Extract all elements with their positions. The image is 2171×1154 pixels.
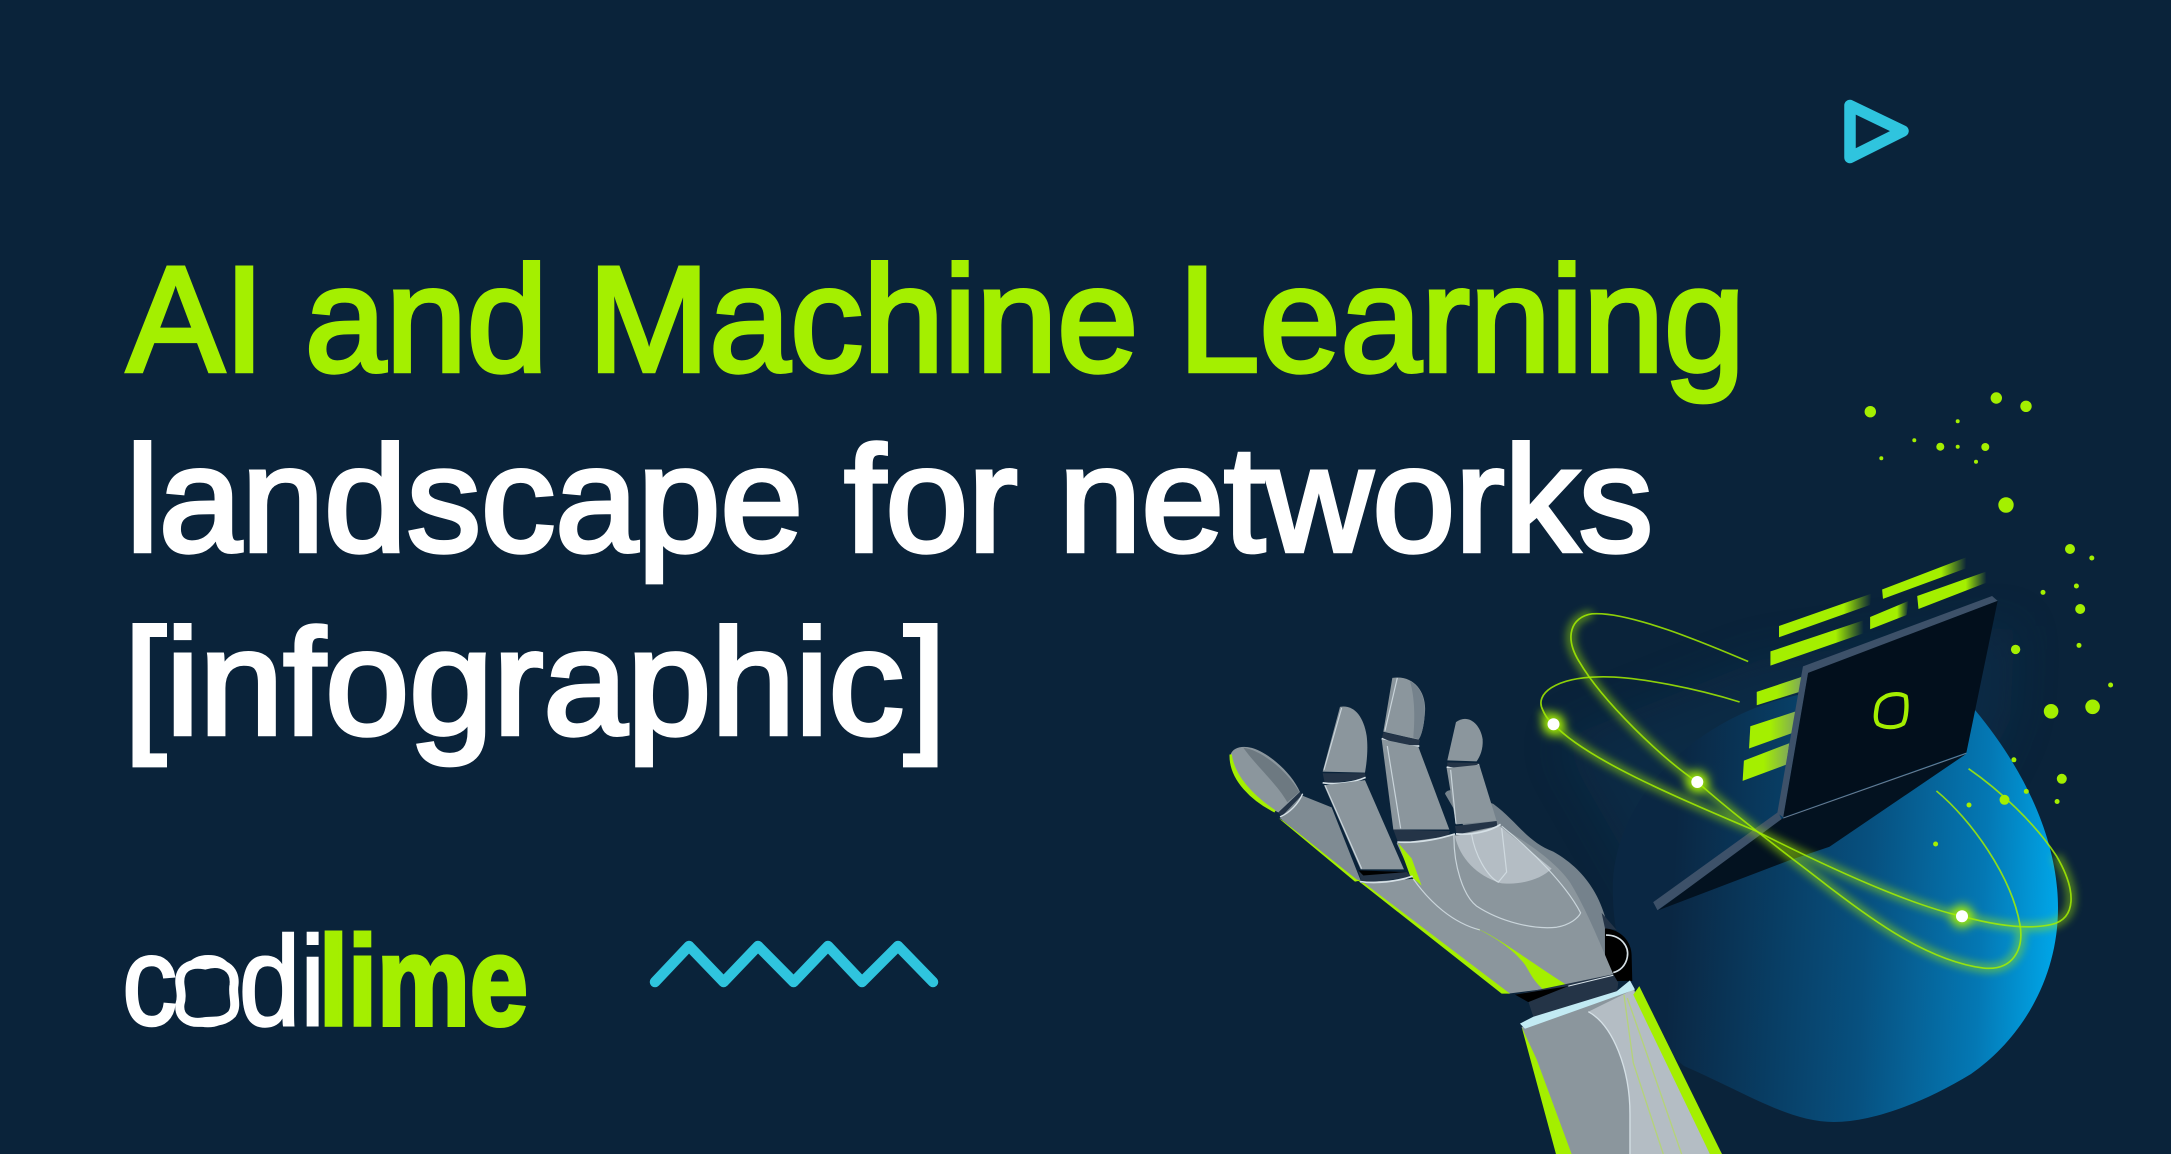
data bars — [1743, 557, 1987, 781]
lime palm accents — [1279, 818, 1568, 994]
title line 1: AI and Machine Learning — [127, 235, 1745, 403]
wrist cuff — [1520, 980, 1635, 1029]
logo: codilime — [122, 910, 528, 1052]
faint glow behind laptop — [1560, 625, 2015, 950]
laptop base — [1658, 754, 1966, 910]
laptop hinge line — [1783, 753, 1966, 818]
logo letter shape: blob o — [180, 964, 235, 1022]
globe — [1560, 625, 2058, 1122]
back of hand — [1445, 790, 1615, 974]
orbit nodes — [1542, 713, 1973, 927]
icon: zigzag — [655, 946, 933, 982]
orbit line b — [1541, 677, 2071, 927]
finger: ring — [1323, 707, 1413, 883]
title — [124, 235, 1745, 766]
title line 3: [infographic] — [124, 598, 946, 766]
palm lines — [1413, 826, 1581, 930]
laptop screen frame — [1777, 596, 1998, 817]
orbits — [1541, 614, 2071, 968]
blue blob — [1613, 688, 2058, 1122]
palm — [1360, 824, 1613, 994]
laptop screen — [1783, 601, 1998, 817]
forearm — [1522, 986, 1722, 1154]
wrist band — [1515, 974, 1618, 1017]
title line 2: landscape for networks — [126, 415, 1653, 583]
robot hand — [1231, 677, 1722, 1154]
icon: play triangle — [1850, 106, 1903, 158]
finger: little — [1231, 747, 1361, 881]
logo word: codi: codi — [122, 910, 325, 1052]
particles: upper cluster — [1865, 392, 2032, 513]
logo word: lime: lime — [319, 910, 528, 1052]
orbit glow — [1543, 614, 2071, 968]
screen logo — [1876, 694, 1907, 727]
laptop keyboard edge — [1653, 812, 1782, 910]
thumb mount — [1455, 826, 1552, 884]
finger: index — [1447, 719, 1501, 835]
orbit line a — [1571, 614, 2021, 968]
finger: middle — [1382, 677, 1455, 843]
wrist joint — [1602, 913, 1632, 981]
laptop — [1653, 557, 1998, 910]
particles: right cluster — [1933, 544, 2113, 846]
